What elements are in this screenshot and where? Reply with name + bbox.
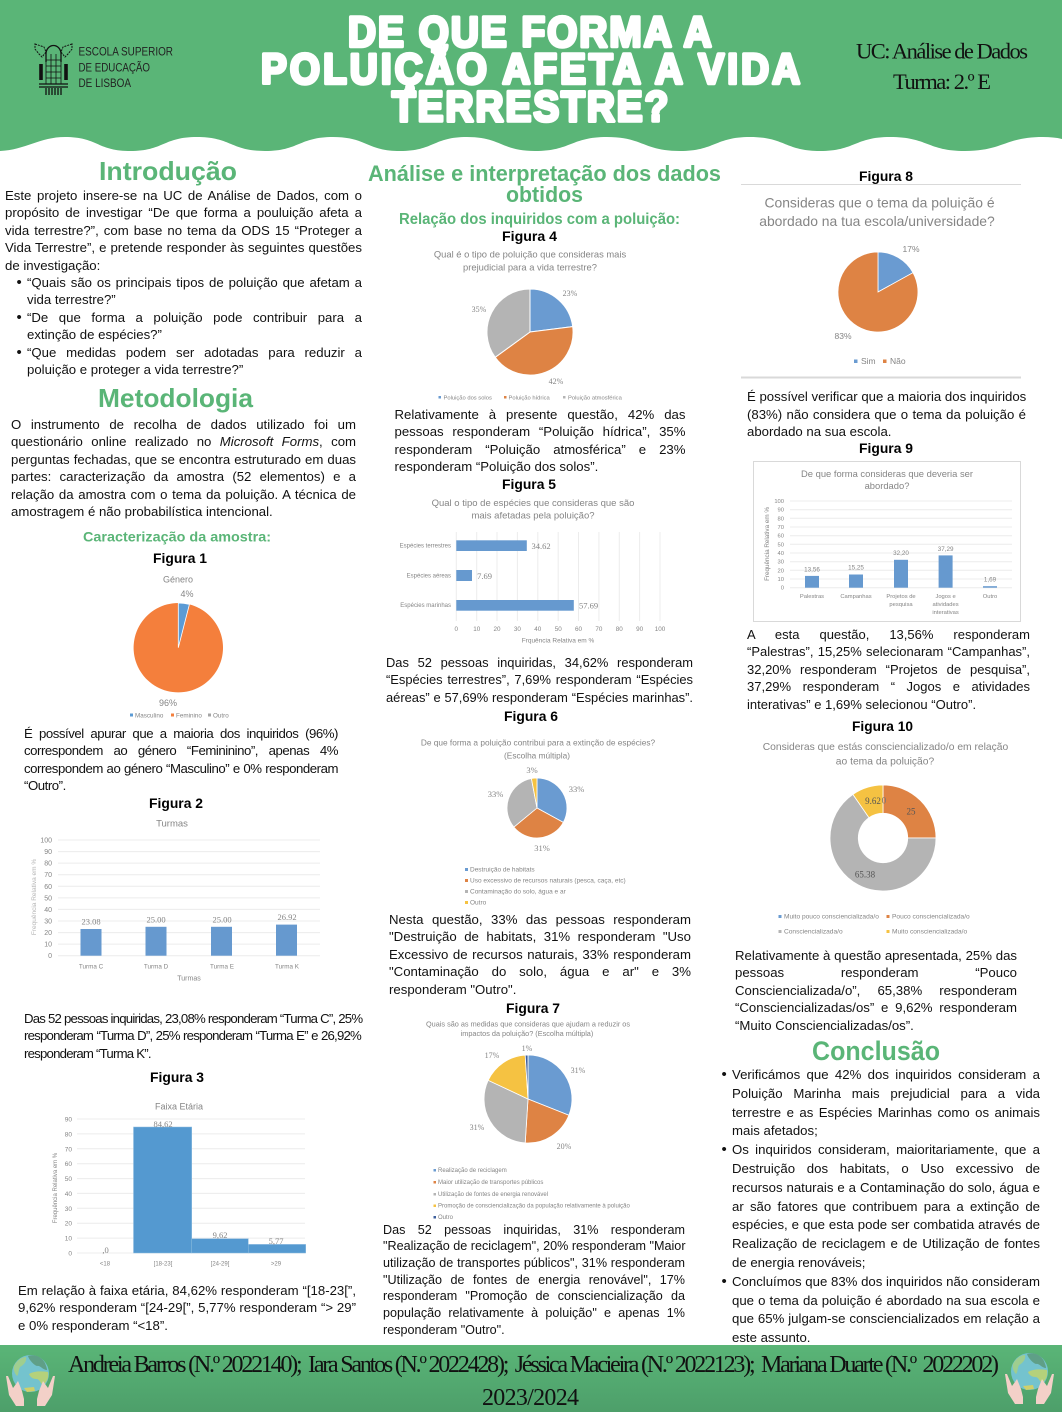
chart: figure 9 bars, how it should be addressed: abordado? (865, 480, 909, 491)
chart: figure 3 histogram, age range: 60 (65, 1161, 72, 1168)
icon: window crest (35, 44, 72, 95)
chart: figure 4 pie, type of pollution: 42% (549, 377, 564, 386)
chart: figure 1 pie, gender: Género (163, 574, 193, 584)
chart: figure 3 histogram, age range (53, 1102, 306, 1268)
legend: Sim (861, 356, 876, 366)
list: conclusions: que o tema da poluição é abordado na sua escola e (732, 1293, 1040, 1308)
chart: figure 2 bars, classes: Frequência Relativa em % (31, 859, 38, 935)
list: conclusions (722, 1066, 1040, 1345)
chart: figure 5 bars, affected species: 100 (655, 626, 666, 633)
chart: figure 9 bars, how it should be addressed: 50 (778, 542, 784, 548)
chart: figure 3 histogram, age range: 80 (65, 1131, 72, 1138)
chart: figure 2 bars, classes: Turma K (275, 964, 300, 970)
text: figure 10 analysis: Relativamente à questão apresentada, 25% das (735, 948, 1017, 962)
legend: Outro (470, 900, 487, 906)
chart: figure 2 bars, classes: 50 (44, 895, 52, 902)
chart: figure 10 donut, awareness (763, 742, 1009, 936)
chart: figure 5 bars, affected species: Espécies aéreas (407, 574, 451, 580)
text: figure 7 analysis: "Realização de reciclagem", 20% responderam "Maior (383, 1239, 686, 1253)
chart: figure 3 histogram, age range: 10 (65, 1236, 72, 1243)
text: figure 9 analysis: “Palestras”, 15,25% selecionaram “Campanhas”, (747, 644, 1030, 659)
course information: UC: Análise de Dados (856, 38, 1028, 64)
legend (465, 866, 626, 906)
chart: figure 7 pie, pollution reduction measures: 17% (485, 1051, 500, 1060)
chart: figure 3 histogram, age range: 84,62 (153, 1119, 173, 1129)
heading: Metodologia: Metodologia (98, 383, 254, 413)
text: • (722, 1273, 727, 1290)
chart: figure 3 histogram, age range: >29 (271, 1262, 282, 1268)
figure 9 heading: Figura 9 (859, 440, 913, 456)
logo text: DE EDUCAÇÃO (78, 60, 150, 74)
footer authors and year: Andreia Barros (N.º 2022140); Iara Santos (N.º 2022428); Jéssica Macieira (N.º 2022123); Mariana Duarte (N.º 2022202) (68, 1352, 999, 1378)
text: figure 8 analysis: (83%) não considera que o tema da poluição é (747, 406, 1026, 422)
text: figure 7 analysis: responderam "Outro". (383, 1323, 505, 1337)
legend: Realização de reciclagem (438, 1168, 507, 1174)
legend: Não (890, 356, 906, 366)
list: conclusions: de energia renováveis; (732, 1255, 865, 1270)
chart: figure 5 bars, affected species: Espécies terrestres (400, 544, 451, 550)
text: figure 3 analysis: e 0% responderam “<18”. (18, 1318, 168, 1332)
list: conclusions: terrestre e as Espécies Marinhas como os animais (732, 1105, 1040, 1120)
list: research questions: “De que forma a poluição pode contribuir para a (27, 310, 362, 324)
text: methodology: partes: caracterização da amostra (52 elementos) e a (11, 469, 356, 484)
chart: figure 9 bars, how it should be addressed: 10 (778, 577, 784, 583)
chart: figure 2 bars, classes: 0 (48, 953, 52, 960)
list: conclusions: Poluição Marinha mais prejudicial para a vida (732, 1086, 1040, 1101)
legend: Promoção de consciencialização da população relativamente à poluição (438, 1204, 630, 1210)
chart: figure 1 pie, gender (130, 574, 229, 720)
chart: figure 1 pie, gender: 4% (180, 589, 194, 599)
chart: figure 5 bars, affected species: Espécies marinhas (400, 603, 451, 609)
chart: figure 3 histogram, age range: 0 (68, 1250, 72, 1258)
logo: Escola Superior de Educação de Lisboa (35, 44, 173, 95)
text: figure 6 analysis: responderam "Outro". (389, 982, 516, 996)
chart: figure 10 donut, awareness: ao tema da poluição? (836, 756, 935, 768)
text: methodology: O instrumento de recolha de dados utilizado foi um (11, 416, 356, 432)
list: research questions: extinção de espécies?” (27, 327, 162, 342)
chart: figure 2 bars, classes: 10 (44, 942, 52, 949)
text: figure 9 analysis: A esta questão, 13,56% responderam (747, 626, 1030, 642)
list: conclusions: este assunto. (732, 1330, 810, 1345)
chart: figure 3 histogram, age range: 50 (65, 1176, 72, 1183)
chart: figure 9 bars, how it should be addressed: 30 (778, 560, 784, 566)
list: research questions (16, 274, 362, 377)
chart: figure 3 histogram, age range: 90 (65, 1116, 72, 1124)
list: conclusions: ar são fatores que contribuem para a extinção de (732, 1199, 1040, 1214)
legend (130, 712, 229, 720)
chart: figure 9 bars, how it should be addressed: 32,20 (893, 550, 909, 557)
course information (856, 38, 1028, 94)
chart: figure 4 pie, type of pollution (434, 248, 626, 402)
text: figure 5 analysis: aéreas” e 57,69% responderam “Espécies marinhas”. (386, 690, 693, 704)
chart: figure 7 pie, pollution reduction measures: impactos da poluição? (Escolha múltipla) (461, 1029, 593, 1038)
chart: figure 6 pie, contribution to extinction: 33% (569, 784, 584, 794)
text: methodology: amostragem é não probabilística intencional. (11, 504, 273, 519)
text: introduction (5, 188, 362, 272)
text: figure 6 analysis: Nesta questão, 33% das pessoas responderam (389, 912, 691, 926)
chart: figure 5 bars, affected species: 60 (575, 626, 582, 633)
chart: figure 5 bars, affected species: 90 (636, 626, 644, 633)
footer authors and year: 2023/2024 (482, 1385, 579, 1411)
text: figure 2 analysis: Das 52 pessoas inquiridas, 23,08% responderam “Turma C”, 25% (24, 1010, 362, 1026)
chart: figure 3 histogram, age range: Faixa Etária (155, 1102, 203, 1112)
text: figure 3 analysis (18, 1282, 356, 1332)
heading: Introdução: Introdução (99, 156, 237, 186)
text: methodology (11, 416, 356, 519)
logo text: DE LISBOA (78, 76, 131, 90)
legend: Poluição dos solos (444, 396, 492, 402)
text: • (722, 1141, 727, 1158)
list: conclusions: Realização de reciclagem e de Utilização de fontes (732, 1236, 1040, 1251)
chart: figure 5 bars, affected species: 0 (455, 626, 459, 633)
text: introduction: vida terrestre?”, com base no tema da ODS 15 “Proteger a (5, 222, 362, 238)
chart: figure 9 bars, how it should be addressed: 37,29 (938, 546, 954, 553)
text: figure 4 analysis (394, 406, 686, 474)
list: research questions: vida terrestre?” (27, 292, 116, 307)
heading: Caracterização da amostra: Caracterização da amostra: (83, 528, 271, 544)
legend: Uso excessivo de recursos naturais (pesca, caça, etc) (470, 878, 626, 884)
heading: Análise e interpretação dos dados (368, 161, 721, 207)
title (261, 8, 800, 130)
chart: figure 6 pie, contribution to extinction: 3% (526, 765, 538, 775)
text: figure 4 analysis: responderam “Poluição dos solos”. (394, 459, 598, 474)
chart: figure 9 bars, how it should be addressed: 20 (778, 568, 784, 574)
list: research questions: “Quais são os principais tipos de poluição que afetam a (27, 274, 362, 290)
chart: figure 2 bars, classes: 80 (44, 861, 52, 868)
text: figure 6 analysis: "Destruição de habitats, 31% responderam "Uso (389, 929, 691, 944)
chart: figure 2 bars, classes: 23.08 (81, 916, 101, 926)
chart: figure 5 bars, affected species: 80 (616, 626, 623, 633)
text: figure 5 analysis (386, 654, 693, 704)
logo text (78, 44, 173, 90)
chart: figure 9 bars, how it should be addressed: 13,56 (804, 566, 820, 574)
chart: figure 3 histogram, age range: [24-29[ (211, 1262, 230, 1268)
chart: figure 9 bars, how it should be addressed: 100 (774, 499, 784, 505)
figure 4 heading: Figura 4 (502, 228, 557, 244)
list: conclusions: Destruição dos habitats, o Uso excessivo de (732, 1161, 1040, 1176)
header band (0, 0, 1062, 151)
chart: figure 3 histogram, age range: 70 (65, 1146, 72, 1153)
chart: figure 7 pie, pollution reduction measures: 20% (557, 1142, 572, 1151)
text: introduction: Vida Terrestre”, e pretende responder às seguintes questões (5, 240, 362, 255)
chart: figure 2 bars, classes: 60 (44, 884, 52, 891)
text: figure 7 analysis: "Utilização de fontes de energia renovável", 17% (383, 1273, 685, 1287)
text: • (722, 1066, 727, 1083)
chart: figure 3 histogram, age range: 30 (65, 1206, 72, 1213)
legend: Outro (438, 1215, 454, 1221)
figure 8 heading: Figura 8 (859, 168, 913, 184)
figure 5 heading: Figura 5 (502, 476, 556, 492)
chart: figure 6 pie, contribution to extinction: 33% (488, 789, 503, 799)
chart: figure 6 pie, contribution to extinction: De que forma a poluição contribui para a extinção de espécies? (421, 738, 656, 748)
chart: figure 8 pie, topic at school: 83% (834, 331, 852, 341)
legend: Contaminação do solo, água e ar (470, 888, 567, 896)
text: figure 5 analysis: “Espécies terrestres”, 7,69% responderam “Espécies (386, 672, 693, 687)
text: figure 10 analysis: pessoas responderam “Pouco (735, 965, 1017, 980)
chart: figure 5 bars, affected species (400, 498, 666, 644)
legend: Utilização de fontes de energia renovável (438, 1192, 548, 1198)
chart: figure 3 histogram, age range: 40 (65, 1191, 72, 1198)
chart: figure 9 bars, how it should be addressed: 1,69 (984, 576, 997, 584)
legend (434, 1168, 630, 1221)
chart: figure 3 histogram, age range: 5,77 (269, 1236, 283, 1246)
chart: figure 9 bars, how it should be addressed: 70 (778, 525, 784, 531)
text: introduction: propósito de investigar “De que forma a pouluição afeta a (5, 205, 362, 220)
title: TERRESTRE? (392, 82, 668, 130)
chart: figure 9 bars, how it should be addressed: De que forma consideras que deveria ser (801, 468, 973, 479)
chart: figure 2 bars, classes: 90 (44, 849, 52, 856)
text: methodology: perguntas fechadas, que se encontra estruturado em duas (11, 452, 356, 466)
chart: figure 7 pie, pollution reduction measures: 1% (522, 1044, 533, 1053)
chart: figure 5 bars, affected species: Qual o tipo de espécies que consideras que são (432, 498, 634, 509)
chart: figure 3 histogram, age range: ,0 (102, 1245, 109, 1255)
chart: figure 10 donut, awareness: 9.62 (865, 796, 881, 806)
text: figure 1 analysis: “Outro”. (24, 778, 66, 793)
chart: figure 2 bars, classes: Turmas (177, 976, 201, 982)
chart: figure 6 pie, contribution to extinction: 31% (534, 843, 550, 853)
chart: figure 5 bars, affected species: 7.69 (477, 571, 492, 581)
text: figure 10 analysis (735, 948, 1017, 1032)
chart: figure 4 pie, type of pollution: prejudicial para a vida terrestre? (463, 262, 597, 272)
chart: figure 2 bars, classes: Turma D (144, 964, 169, 970)
legend: Muito consciencializada/o (892, 928, 967, 936)
text: figure 7 analysis: população relativamente à poluição" e apenas 1% (383, 1306, 685, 1320)
legend (438, 396, 623, 402)
chart: figure 8 pie, topic at school: Consideras que o tema da poluição é (764, 194, 995, 210)
text: figure 4 analysis: responderam “Poluição atmosférica” e 23% (394, 442, 686, 456)
chart: figure 10 donut, awareness: 0 (882, 796, 887, 806)
chart: figure 9 bars, how it should be addressed: Jogos e (935, 594, 956, 600)
text: • (16, 308, 22, 326)
icon: globe in hands, right (1005, 1353, 1054, 1404)
legend: Muito pouco consciencializada/o (784, 914, 879, 920)
title: DE QUE FORMA A (348, 8, 712, 56)
text: introduction: Este projeto insere-se na UC de Análise de Dados, com o (5, 188, 362, 202)
logo text: ESCOLA SUPERIOR (78, 44, 173, 58)
text: figure 3 analysis: Em relação à faixa etária, 84,62% responderam “[18-23[”, (18, 1282, 356, 1298)
chart: figure 5 bars, affected species: 40 (534, 626, 542, 633)
title: POLUIÇÃO AFETA A VIDA (261, 45, 800, 93)
text: figure 4 analysis: Relativamente à presente questão, 42% das (394, 406, 686, 422)
chart: figure 7 pie, pollution reduction measures: Quais são as medidas que consideras que ajudam a reduzir os (426, 1020, 630, 1028)
text: figure 2 analysis: responderam “Turma K”. (24, 1046, 151, 1060)
text: figure 1 analysis: correspondem ao género “Masculino” e 0% responderam (24, 760, 338, 776)
chart: figure 5 bars, affected species: Frquência Relativa em % (522, 638, 595, 644)
text: figure 10 analysis: “Consciencializadas/os” e 9,62% responderam (735, 1000, 1017, 1015)
chart: figure 9 bars, how it should be addressed: 15,25 (848, 564, 864, 572)
chart: figure 8 pie, topic at school: 17% (902, 244, 920, 254)
chart: figure 5 bars, affected species: 70 (595, 626, 603, 633)
chart: figure 1 pie, gender: 96% (159, 698, 177, 708)
text: methodology: relação da amostra com o tema da poluição. A técnica de (11, 486, 356, 502)
figure 6 heading: Figura 6 (504, 708, 558, 724)
text: figure 10 analysis: Consciencializada/o”, 65,38% responderam (735, 982, 1017, 998)
text: figure 8 analysis: abordado na sua escola. (747, 424, 891, 439)
chart: figure 2 bars, classes: 25.00 (146, 914, 166, 924)
chart: figure 8 pie, topic at school (741, 184, 1021, 378)
chart: figure 2 bars, classes: Turma C (79, 964, 104, 970)
text: figure 7 analysis: Das 52 pessoas inquiridas, 31% responderam (383, 1222, 685, 1236)
chart: figure 7 pie, pollution reduction measures: 31% (470, 1123, 485, 1132)
figure 10 heading: Figura 10 (852, 718, 913, 734)
chart: figure 4 pie, type of pollution: 23% (563, 289, 578, 298)
text: figure 6 analysis: Excessivo de recursos naturais, 33% responderam (389, 946, 691, 962)
text: figure 10 analysis: “Muito Consciencializadas/os”. (735, 1018, 914, 1032)
chart: figure 2 bars, classes: 26.92 (277, 912, 297, 922)
legend: Masculino (135, 712, 164, 720)
list: conclusions: mais afetados; (732, 1123, 818, 1138)
figure 1 heading: Figura 1 (153, 550, 207, 566)
chart: figure 10 donut, awareness: Consideras que estás consciencializado/o em relação (763, 742, 1009, 753)
heading: Conclusão: Conclusão (812, 1036, 940, 1066)
list: conclusions: que 65% julgam-se consciencializados em relação a (732, 1311, 1040, 1326)
chart: figure 2 bars, classes: Turma E (210, 964, 234, 970)
chart: figure 5 bars, affected species: 50 (555, 626, 562, 633)
heading: Análise e interpretação dos dados: Análise e interpretação dos dados (368, 161, 721, 186)
text: figure 9 analysis: interativas” e 1,69% selecionou “Outro”. (747, 696, 976, 712)
list: conclusions: espécies, e que esta pode ser combatida através de (732, 1217, 1040, 1232)
chart: figure 9 bars, how it should be addressed: Frequência Relativa em % (764, 507, 771, 581)
text: figure 2 analysis (24, 1010, 363, 1060)
legend: Outro (213, 712, 229, 720)
text: figure 3 analysis: 9,62% responderam “[24-29[”, 5,77% responderam “> 29” (18, 1300, 356, 1315)
chart: figure 9 bars, how it should be addressed: 0 (781, 586, 784, 592)
chart: figure 4 pie, type of pollution: 35% (472, 305, 487, 314)
chart: figure 3 histogram, age range: Frequência Relativa em % (53, 1152, 59, 1223)
chart: figure 5 bars, affected species: 20 (493, 626, 501, 633)
text: figure 6 analysis (389, 912, 691, 996)
chart: figure 2 bars, classes: 30 (44, 918, 52, 926)
text: methodology: questionário online realizado no Microsoft Forms, com (11, 434, 356, 449)
chart: figure 9 bars, how it should be addressed: atividades (933, 602, 959, 608)
chart: figure 5 bars, affected species: mais afetadas pela poluição? (471, 510, 595, 522)
chart: figure 3 histogram, age range: 9,62 (213, 1230, 227, 1240)
legend (854, 356, 906, 366)
chart: figure 7 pie, pollution reduction measures (426, 1020, 630, 1221)
chart: figure 7 pie, pollution reduction measures: 31% (571, 1066, 586, 1075)
text: figure 1 analysis: É possível apurar que a maioria dos inquiridos (96%) (24, 726, 338, 740)
text: figure 6 analysis: "Contaminação do solo, água e ar" e 3% (389, 964, 691, 979)
chart: figure 5 bars, affected species: 10 (473, 626, 481, 633)
chart: figure 5 bars, affected species: 57.69 (579, 600, 598, 610)
chart: figure 6 pie, contribution to extinction: (Escolha múltipla) (504, 750, 570, 760)
course information: Turma: 2.º E (893, 69, 991, 94)
chart: figure 3 histogram, age range: <18 (100, 1262, 111, 1268)
figure 3 heading: Figura 3 (150, 1069, 204, 1085)
chart: figure 9 bars, how it should be addressed: Campanhas (840, 594, 872, 600)
chart: figure 8 pie, topic at school: abordado na tua escola/universidade? (759, 213, 995, 229)
legend: Destruição de habitats (470, 866, 535, 874)
chart: figure 9 bars, how it should be addressed: 40 (778, 551, 784, 557)
chart: figure 2 bars, classes: 70 (44, 872, 52, 879)
figure 7 heading: Figura 7 (506, 1000, 560, 1016)
chart: figure 9 bars, how it should be addressed: 60 (778, 534, 784, 540)
text: figure 9 analysis (747, 626, 1030, 712)
chart: figure 9 bars, how it should be addressed: pesquisa (889, 602, 913, 608)
text: figure 5 analysis: Das 52 pessoas inquiridas, 34,62% responderam (386, 654, 693, 670)
text: figure 4 analysis: pessoas responderam “Poluição hídrica”, 35% (394, 424, 686, 439)
text: figure 7 analysis: responderam "Promoção de consciencialização da (383, 1289, 685, 1303)
chart: figure 9 bars, how it should be addressed (754, 462, 1020, 622)
legend: Maior utilização de transportes públicos (438, 1180, 543, 1186)
text: figure 7 analysis: utilização de transportes públicos", 31% responderam (383, 1256, 685, 1270)
heading: Análise e interpretação dos dados: obtidos (506, 182, 583, 207)
legend: Poluição atmosférica (568, 396, 623, 402)
text: figure 8 analysis: É possível verificar que a maioria dos inquiridos (747, 389, 1026, 404)
chart: figure 2 bars, classes: 20 (44, 930, 52, 937)
list: research questions: “Que medidas podem ser adotadas para reduzir a (27, 344, 362, 360)
icon: globe in hands, left (6, 1355, 55, 1406)
chart: figure 10 donut, awareness: 65.38 (855, 870, 876, 880)
footer authors and year (68, 1352, 999, 1411)
chart: figure 4 pie, type of pollution: Qual é o tipo de poluição que consideras mais (434, 248, 626, 260)
chart: figure 9 bars, how it should be addressed: 90 (778, 508, 784, 514)
text: • (16, 344, 22, 360)
text: figure 9 analysis: 37,29% responderam “ Jogos e atividades (747, 679, 1030, 694)
list: conclusions: Concluímos que 83% dos inquiridos não consideram (732, 1274, 1040, 1289)
chart: figure 2 bars, classes: 40 (44, 907, 52, 914)
text: figure 9 analysis: 32,20% responderam “Projetos de pesquisa”, (747, 662, 1030, 676)
chart: figure 3 histogram, age range: 20 (65, 1221, 72, 1228)
chart: figure 2 bars, classes: 25.00 (212, 914, 232, 924)
text: figure 7 analysis (383, 1222, 686, 1337)
list: conclusions: recursos naturais e a Contaminação do solo, água e (732, 1180, 1040, 1195)
text: introduction: de investigação: (5, 258, 100, 272)
list: conclusions: Os inquiridos consideram, maioritariamente, que a (732, 1142, 1040, 1157)
text: figure 2 analysis: responderam “Turma D”, 25% responderam “Turma E” e 26,92% (24, 1028, 361, 1043)
list: conclusions: Verificámos que 42% dos inquiridos consideram a (732, 1067, 1040, 1082)
chart: figure 9 bars, how it should be addressed: 80 (778, 516, 784, 522)
chart: figure 9 bars, how it should be addressed: interativas (932, 610, 959, 616)
subheading: relação com a poluição: Relação dos inquiridos com a poluição: (399, 211, 680, 228)
chart: figure 6 pie, contribution to extinction (421, 738, 656, 906)
chart: figure 5 bars, affected species: 34.62 (531, 541, 551, 551)
chart: figure 2 bars, classes (31, 818, 320, 982)
chart: figure 9 bars, how it should be addressed: Projetos de (886, 594, 916, 600)
figure 2 heading: Figura 2 (149, 795, 203, 811)
chart: figure 2 bars, classes: 100 (40, 838, 52, 844)
chart: figure 5 bars, affected species: 30 (514, 626, 521, 633)
chart: figure 10 donut, awareness: 25 (906, 806, 916, 816)
chart: figure 9 bars, how it should be addressed: Palestras (800, 594, 824, 600)
legend: Poluição hídrica (508, 396, 551, 402)
text: • (16, 274, 22, 290)
text: figure 1 analysis: correspondem ao género “Femininino”, apenas 4% (24, 743, 338, 758)
chart: figure 2 bars, classes: Turmas (156, 818, 188, 830)
chart: figure 9 bars, how it should be addressed: Outro (983, 594, 997, 600)
legend (778, 914, 970, 936)
legend: Pouco consciencializada/o (892, 914, 970, 920)
chart: figure 3 histogram, age range: [18-23[ (154, 1262, 173, 1268)
list: research questions: poluição e proteger a vida terrestre?” (27, 362, 243, 377)
footer band (0, 1345, 1062, 1412)
legend: Feminino (176, 712, 202, 720)
legend: Consciencializada/o (784, 928, 843, 936)
text: figure 8 analysis (747, 389, 1026, 439)
text: figure 1 analysis (24, 726, 338, 793)
